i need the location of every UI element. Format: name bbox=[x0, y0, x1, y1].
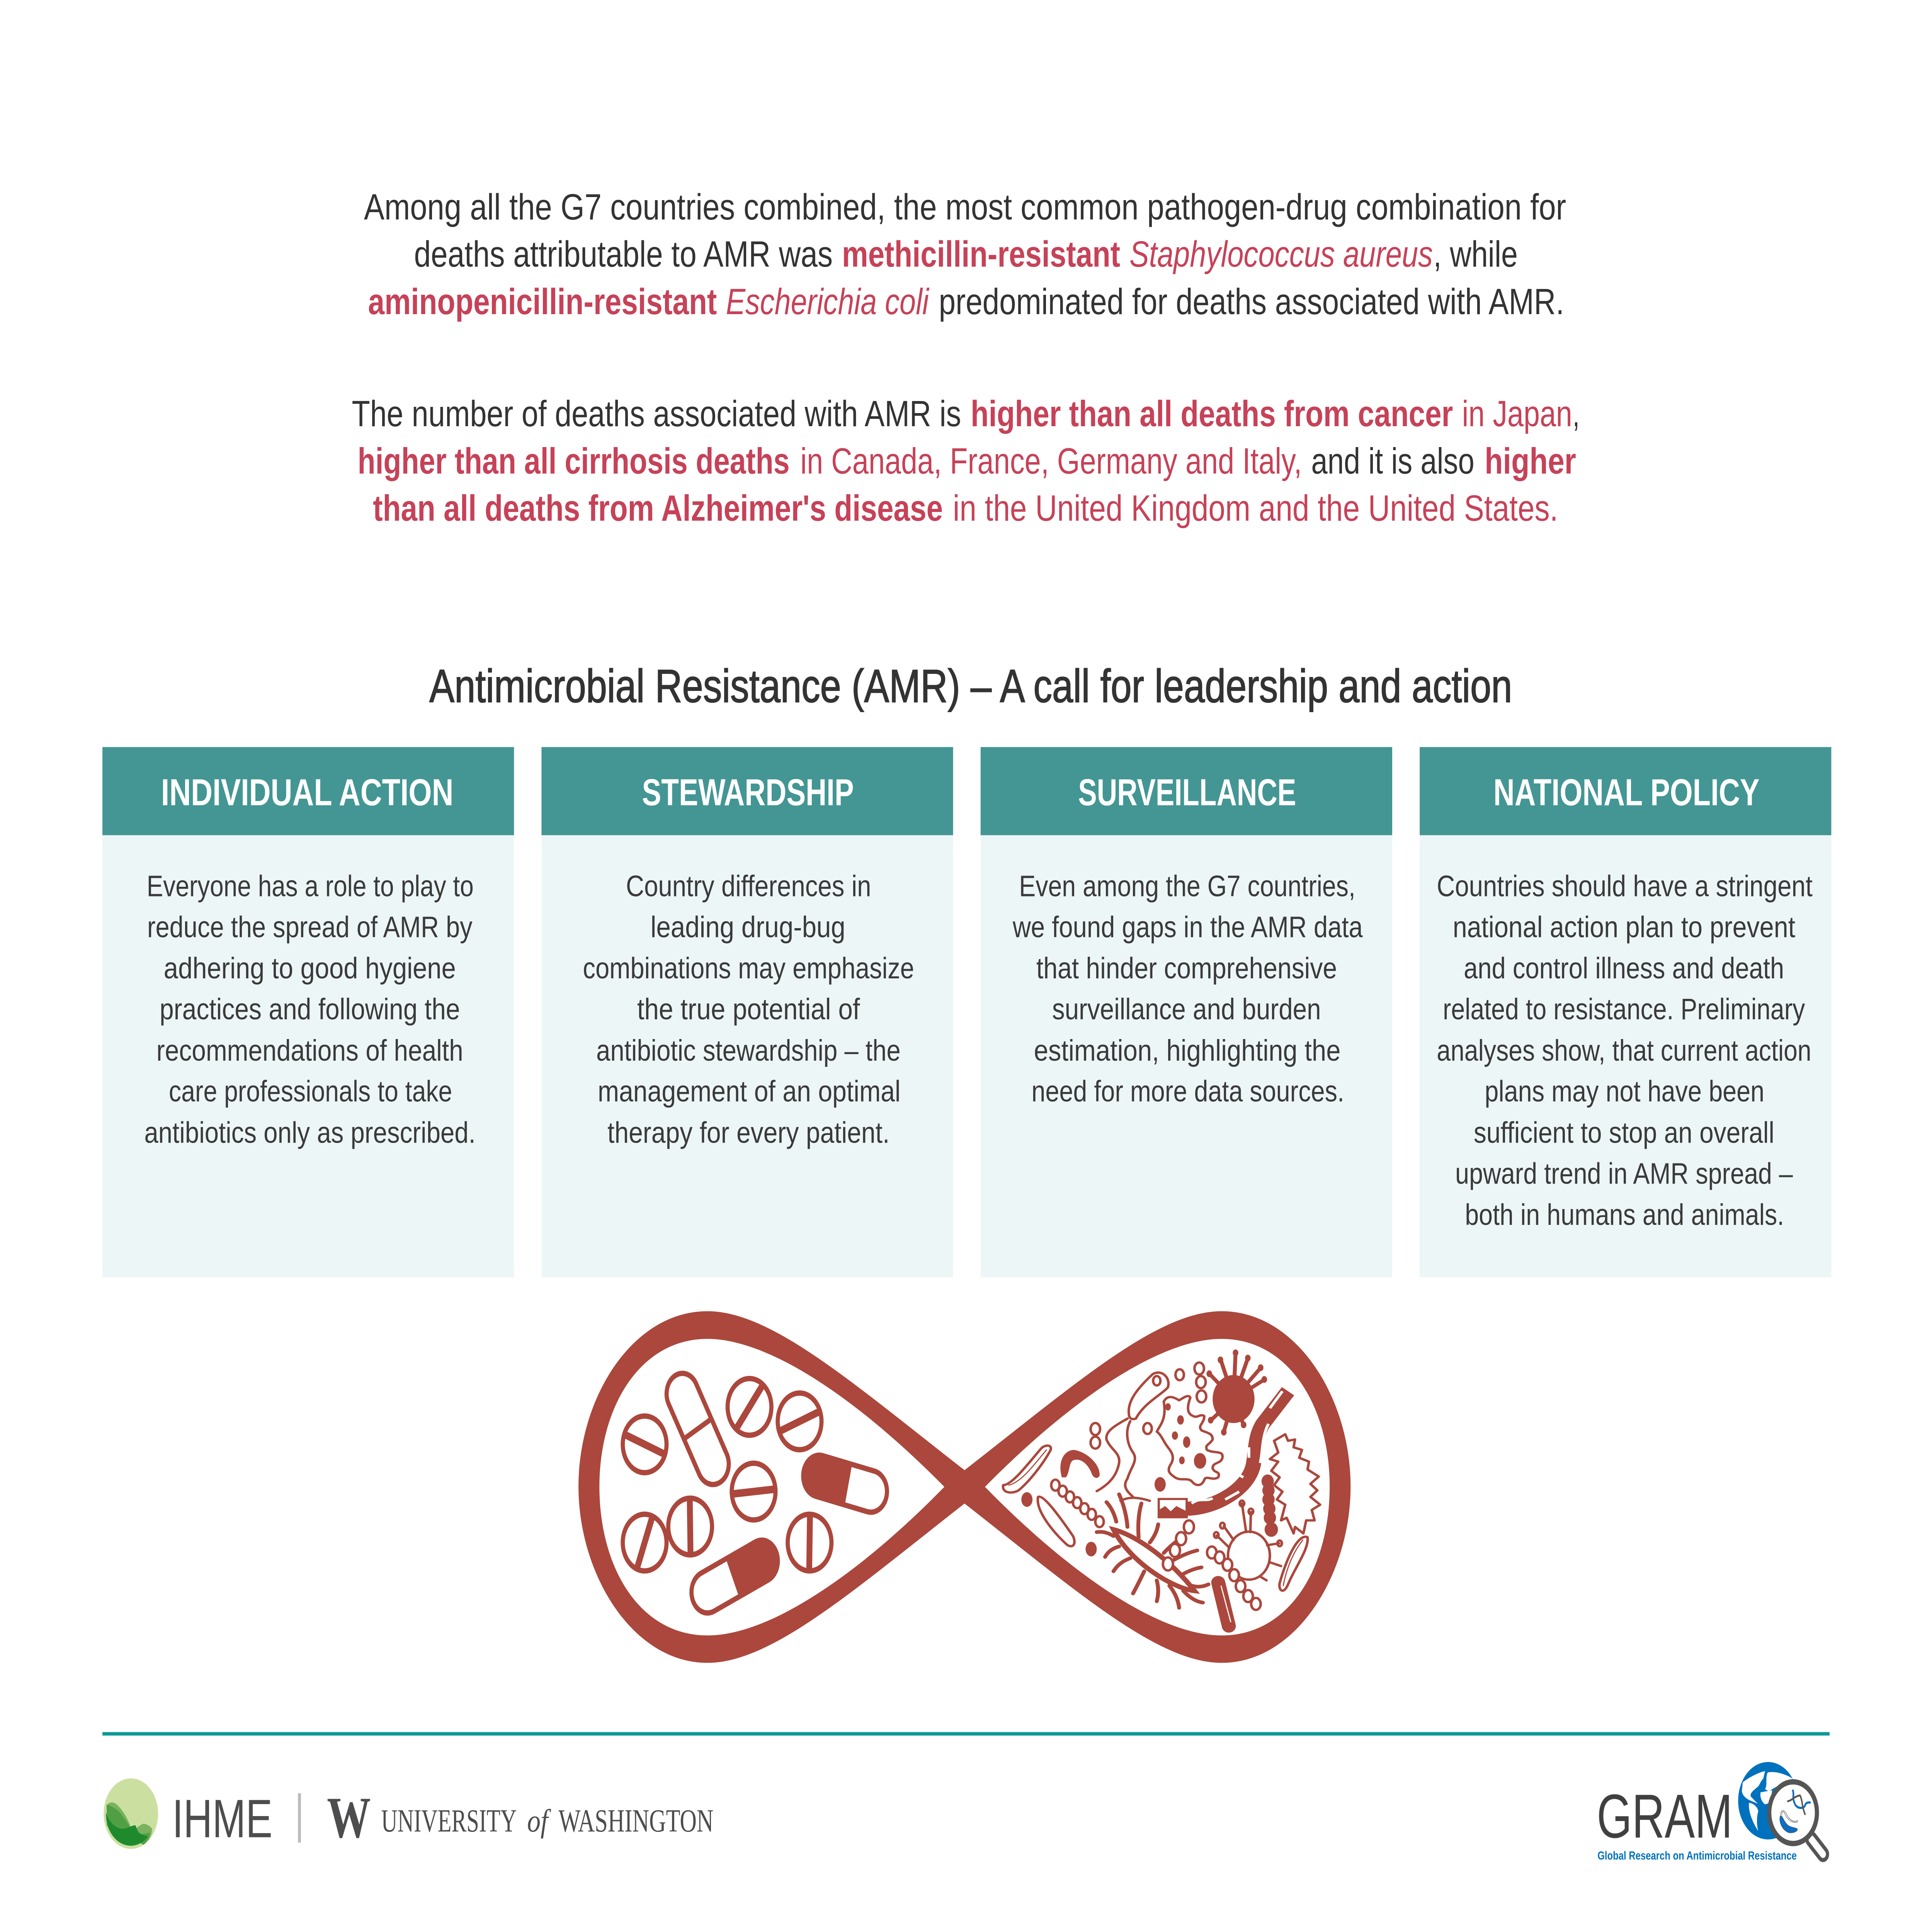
icon: IHME green circle bbox=[104, 1778, 158, 1849]
text block: pathogen-drug combinations: Among all the G7 countries combined, the most common pathogen-drug combination for bbox=[364, 187, 1566, 227]
panel text: stewardship: the true potential of bbox=[637, 992, 860, 1026]
logo: GRAM: GRAM bbox=[1597, 1782, 1733, 1851]
panel text: national policy: both in humans and animals. bbox=[1465, 1198, 1784, 1231]
text block: AMR deaths compared with other causes: in Japan bbox=[1462, 393, 1572, 434]
panel text: stewardship: management of an optimal bbox=[598, 1074, 901, 1108]
panel text: national policy: upward trend in AMR spread – bbox=[1455, 1156, 1793, 1190]
panel text: stewardship: therapy for every patient. bbox=[607, 1116, 889, 1149]
text block: pathogen-drug combinations bbox=[364, 187, 1566, 322]
panel text: individual action: reduce the spread of AMR by bbox=[147, 910, 473, 944]
panel text: national policy: plans may not have been bbox=[1485, 1074, 1764, 1108]
text block: AMR deaths compared with other causes: higher bbox=[1485, 440, 1576, 481]
logo: University of Washington: UNIVERSITY bbox=[381, 1803, 517, 1839]
panel text: individual action bbox=[144, 869, 476, 1149]
panel heading: individual action: INDIVIDUAL ACTION bbox=[161, 771, 454, 813]
panel text: individual action: recommendations of health bbox=[156, 1033, 463, 1067]
text block: AMR deaths compared with other causes: , bbox=[1573, 393, 1580, 434]
text block: AMR deaths compared with other causes: and it is also bbox=[1311, 440, 1475, 481]
panel text: surveillance bbox=[1012, 869, 1363, 1108]
panel text: national policy: sufficient to stop an overall bbox=[1474, 1116, 1774, 1149]
panel text: individual action: adhering to good hygiene bbox=[164, 951, 456, 985]
panel heading: stewardship: STEWARDSHIP bbox=[642, 771, 854, 813]
panel: individual action bbox=[102, 747, 514, 1277]
text block: pathogen-drug combinations: deaths attributable to AMR was bbox=[414, 234, 833, 274]
text block: pathogen-drug combinations: methicillin-resistant bbox=[842, 234, 1120, 274]
text block: pathogen-drug combinations: , while bbox=[1433, 234, 1518, 274]
panel heading: surveillance: SURVEILLANCE bbox=[1078, 771, 1296, 813]
panel text: individual action: practices and following the bbox=[160, 992, 460, 1026]
logo: GRAM bbox=[1597, 1762, 1823, 1862]
panel text: individual action: care professionals to take bbox=[169, 1074, 452, 1108]
panel text: national policy: and control illness and death bbox=[1464, 951, 1784, 985]
text block: pathogen-drug combinations: predominated for deaths associated with AMR. bbox=[939, 281, 1564, 322]
text block: AMR deaths compared with other causes bbox=[352, 393, 1580, 529]
text block: AMR deaths compared with other causes: in Canada, France, Germany and Italy, bbox=[800, 440, 1302, 481]
panel text: surveillance: estimation, highlighting the bbox=[1034, 1033, 1341, 1067]
panel: stewardship bbox=[541, 747, 953, 1277]
text block: pathogen-drug combinations: Escherichia coli bbox=[726, 281, 930, 322]
logo: University of Washington bbox=[327, 1785, 714, 1850]
panel text: stewardship: combinations may emphasize bbox=[583, 951, 914, 985]
logo divider bbox=[298, 1793, 301, 1843]
icon: magnifying glass bbox=[1769, 1782, 1823, 1854]
icons: bacteria and viruses bbox=[1003, 1349, 1320, 1626]
panel text: stewardship: antibiotic stewardship – the bbox=[596, 1033, 901, 1067]
logo: IHME: IHME bbox=[172, 1788, 272, 1849]
text block: AMR deaths compared with other causes: higher than all cirrhosis deaths bbox=[357, 440, 790, 481]
text block: pathogen-drug combinations: aminopenicillin-resistant bbox=[368, 281, 717, 322]
panel text: stewardship bbox=[583, 869, 914, 1149]
panel: national policy bbox=[1420, 747, 1831, 1277]
panel text: surveillance: need for more data sources. bbox=[1031, 1074, 1344, 1108]
panel text: surveillance: surveillance and burden bbox=[1052, 992, 1321, 1026]
text block: AMR deaths compared with other causes: in the United Kingdom and the United States. bbox=[953, 488, 1558, 529]
icons: tablets and capsules bbox=[616, 1366, 891, 1622]
logo: GRAM: Global Research on Antimicrobial Resistance bbox=[1597, 1849, 1797, 1862]
panel text: national policy: national action plan to prevent bbox=[1453, 910, 1795, 944]
panel text: individual action: Everyone has a role to play to bbox=[147, 869, 474, 903]
panel text: national policy: analyses show, that current action bbox=[1437, 1033, 1811, 1067]
logo: University of Washington: of bbox=[527, 1803, 551, 1839]
panel text: national policy: Countries should have a stringent bbox=[1437, 869, 1813, 903]
icon: globe bbox=[1738, 1762, 1798, 1839]
infinity outline bbox=[578, 1311, 1350, 1663]
panel text: surveillance: that hinder comprehensive bbox=[1036, 951, 1337, 985]
logo: IHME bbox=[104, 1778, 272, 1849]
panel text: surveillance: we found gaps in the AMR data bbox=[1012, 910, 1363, 944]
panel heading: national policy: NATIONAL POLICY bbox=[1493, 771, 1760, 813]
text block: AMR deaths compared with other causes: The number of deaths associated with AMR is bbox=[352, 393, 961, 434]
logo: University of Washington: W bbox=[327, 1785, 371, 1850]
heading: Antimicrobial Resistance (AMR) – A call for leadership and action bbox=[429, 660, 1512, 712]
footer divider bbox=[102, 1732, 1830, 1736]
panel text: surveillance: Even among the G7 countries, bbox=[1019, 869, 1355, 903]
panel text: stewardship: Country differences in bbox=[626, 869, 871, 903]
text block: pathogen-drug combinations: Staphylococcus aureus bbox=[1129, 234, 1433, 274]
panel text: national policy: related to resistance. Preliminary bbox=[1443, 992, 1805, 1026]
text block: AMR deaths compared with other causes: than all deaths from Alzheimer's disease bbox=[373, 488, 943, 529]
text block: AMR deaths compared with other causes: higher than all deaths from cancer bbox=[971, 393, 1453, 434]
panel text: stewardship: leading drug-bug bbox=[650, 910, 845, 944]
panel text: individual action: antibiotics only as prescribed. bbox=[144, 1116, 476, 1149]
logo: University of Washington: WASHINGTON bbox=[558, 1803, 714, 1839]
panel: surveillance bbox=[981, 747, 1392, 1277]
infinity symbol: drugs and microbes bbox=[578, 1311, 1350, 1663]
panel text: national policy bbox=[1437, 869, 1813, 1231]
